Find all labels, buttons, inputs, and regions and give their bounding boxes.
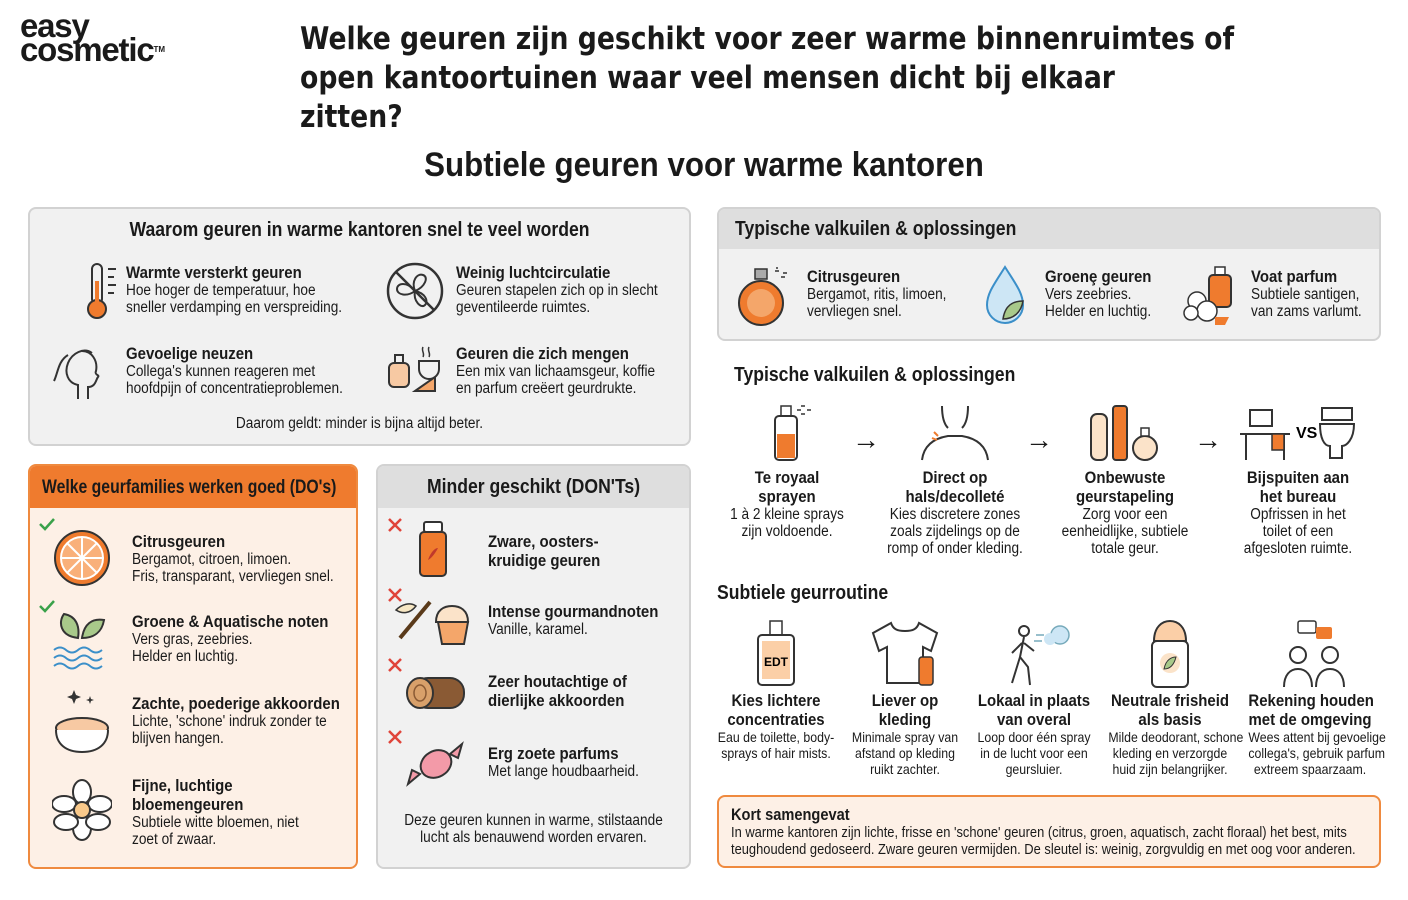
item: citrus: Fris, transparant, vervliegen snel. bbox=[132, 568, 334, 585]
footer text: lucht als benauwend worden ervaren. bbox=[420, 829, 647, 846]
callout: summary: In warme kantoren zijn lichte, frisse en 'schone' geuren (citrus, groen, aquatisch, zacht floraal) het best, mits bbox=[731, 824, 1347, 841]
item: oosters: kruidige geuren bbox=[488, 551, 600, 570]
logo bbox=[20, 7, 165, 68]
footer text: Deze geuren kunnen in warme, stilstaande bbox=[404, 812, 663, 829]
step: stapeling bbox=[1062, 405, 1188, 557]
step: bureau: het bureau bbox=[1260, 487, 1336, 506]
step: hals: hals/decolleté bbox=[906, 487, 1004, 506]
item: omgeving: Wees attent bij gevoelige bbox=[1248, 729, 1386, 745]
callout: summary: Kort samengevat bbox=[731, 805, 850, 824]
item: bloemen: zoet of zwaar. bbox=[132, 831, 216, 848]
text: warmte: sneller verdamping en verspreiding. bbox=[126, 299, 342, 316]
item: hout: Zeer houtachtige of bbox=[488, 672, 627, 691]
item: groen: Vers zeebries. bbox=[1045, 286, 1131, 303]
item: omgeving: extreem spaarzaam. bbox=[1254, 761, 1366, 777]
text: luchtcirculatie: geventileerde ruimtes. bbox=[456, 299, 590, 316]
item: parfum bbox=[1183, 266, 1362, 325]
item: kleding: Liever op bbox=[872, 691, 938, 710]
title bbox=[300, 21, 1234, 135]
step: stapeling: eenheidlijke, subtiele bbox=[1062, 523, 1188, 540]
panel: typische valkuilen top bbox=[717, 207, 1381, 341]
item: deodorant: Milde deodorant, schone bbox=[1108, 729, 1243, 745]
item: lokaal: Lokaal in plaats bbox=[978, 691, 1090, 710]
arrow: → bbox=[1025, 424, 1053, 455]
header: Typische valkuilen & oplossingen bbox=[735, 218, 1016, 240]
step: stapeling: Zorg voor een bbox=[1083, 506, 1167, 523]
title: open kantoortuinen waar veel mensen dicht bij elkaar bbox=[300, 60, 1115, 96]
header: Minder geschikt (DON'Ts) bbox=[427, 476, 640, 498]
item: poederig: Zachte, poederige akkoorden bbox=[132, 694, 340, 713]
item: parfum: Voat parfum bbox=[1251, 267, 1337, 286]
step: bureau: Bijspuiten aan bbox=[1247, 468, 1349, 487]
item: gourmand: Intense gourmandnoten bbox=[488, 602, 658, 621]
item: citrus: Bergamot, ritis, limoen, bbox=[807, 286, 946, 303]
text: warmte: Warmte versterkt geuren bbox=[126, 263, 302, 282]
item: citrus: vervliegen snel. bbox=[807, 303, 902, 320]
item: hout bbox=[388, 658, 627, 710]
header bbox=[719, 209, 1379, 249]
item: deodorant: huid zijn belangrijker. bbox=[1112, 761, 1228, 777]
item: oosters bbox=[388, 518, 600, 577]
steps row bbox=[730, 405, 1355, 557]
panel: why scents get too much bbox=[28, 207, 691, 446]
heading: Waarom geuren in warme kantoren snel te veel worden bbox=[129, 219, 590, 241]
step: royaal: zijn voldoende. bbox=[741, 523, 832, 540]
step: royaal bbox=[730, 405, 844, 540]
item: groen: Groene & Aquatische noten bbox=[132, 612, 328, 631]
item: kleding: Minimale spray van bbox=[852, 729, 958, 745]
text: mengen: en parfum creëert geurdrukte. bbox=[456, 380, 636, 397]
footer text bbox=[404, 812, 663, 846]
subtitle: Subtiele geuren voor warme kantoren bbox=[424, 146, 984, 184]
callout: summary: teughoudend gedoseerd. Zware geuren vermijden. De sleutel is: weinig, zorgvuldig en met oog voor anderen. bbox=[731, 841, 1356, 858]
item: EDT: Kies lichtere bbox=[732, 691, 820, 710]
item: groen bbox=[39, 600, 328, 670]
item: bloemen: Fijne, luchtige bbox=[132, 776, 233, 795]
step: royaal: 1 à 2 kleine sprays bbox=[730, 506, 844, 523]
item: bloemen bbox=[52, 776, 299, 848]
item: omgeving: collega's, gebruik parfum bbox=[1248, 745, 1385, 761]
item: citrus bbox=[738, 267, 946, 326]
text: warmte bbox=[126, 263, 342, 316]
step: hals: zoals zijdelings op de bbox=[890, 523, 1020, 540]
item: poederig: blijven hangen. bbox=[132, 730, 224, 747]
item: omgeving bbox=[1248, 620, 1386, 777]
item: deodorant: als basis bbox=[1138, 710, 1202, 729]
item: citrus bbox=[39, 518, 334, 586]
step: royaal: sprayen bbox=[758, 487, 816, 506]
logo: easy bbox=[20, 7, 89, 44]
item: parfum: Subtiele santigen, bbox=[1251, 286, 1359, 303]
item: groen: Helder en luchtig. bbox=[1045, 303, 1151, 320]
icon: heads bbox=[53, 350, 100, 399]
item: citrus: Citrusgeuren bbox=[132, 532, 225, 551]
item: omgeving: Rekening houden bbox=[1248, 691, 1374, 710]
item: groen: Groenȩ geuren bbox=[1045, 267, 1151, 286]
item: lokaal: geursluier. bbox=[1006, 761, 1062, 777]
text: luchtcirculatie: Weinig luchtcirculatie bbox=[456, 263, 610, 282]
step: bureau: VS bbox=[1296, 425, 1318, 442]
item: kleding: kleding bbox=[879, 710, 931, 729]
footer text: Daarom geldt: minder is bijna altijd beter. bbox=[236, 415, 483, 432]
text: gevoelige neuzen bbox=[126, 344, 343, 397]
title: zitten? bbox=[300, 99, 403, 135]
text: mengen bbox=[456, 344, 655, 397]
heading: routine: Subtiele geurroutine bbox=[717, 582, 888, 604]
logo: cosmeticTM bbox=[20, 31, 165, 68]
item: omgeving: met de omgeving bbox=[1248, 710, 1372, 729]
callout: summary bbox=[717, 795, 1381, 868]
item: EDT: sprays of hair mists. bbox=[721, 745, 831, 761]
item: kleding: ruikt zachter. bbox=[870, 761, 940, 777]
item: deodorant: kleding en verzorgde bbox=[1113, 745, 1227, 761]
item: zoet bbox=[388, 730, 639, 787]
icon: mixing bbox=[388, 346, 440, 392]
step: bureau: afgesloten ruimte. bbox=[1244, 540, 1352, 557]
item: groen bbox=[986, 265, 1151, 324]
text: luchtcirculatie bbox=[456, 263, 658, 316]
item: groen: Helder en luchtig. bbox=[132, 648, 238, 665]
item: hout: dierlijke akkoorden bbox=[488, 691, 624, 710]
step: stapeling: geurstapeling bbox=[1076, 487, 1174, 506]
header: Welke geurfamilies werken goed (DO's) bbox=[42, 477, 336, 498]
text: gevoelige neuzen: Collega's kunnen reageren met bbox=[126, 363, 315, 380]
step: stapeling: totale geur. bbox=[1091, 540, 1159, 557]
arrow: → bbox=[1194, 424, 1222, 455]
item: lokaal: in de lucht voor een bbox=[980, 745, 1088, 761]
arrow: → bbox=[852, 424, 880, 455]
item: oosters: Zware, oosters- bbox=[488, 532, 599, 551]
step: hals: Kies discretere zones bbox=[890, 506, 1020, 523]
item: gourmand bbox=[388, 588, 658, 645]
text: mengen: Een mix van lichaamsgeur, koffie bbox=[456, 363, 655, 380]
step: hals: Direct op bbox=[923, 468, 987, 487]
step: stapeling: Onbewuste bbox=[1085, 468, 1165, 487]
item: citrus: Citrusgeuren bbox=[807, 267, 900, 286]
item: kleding bbox=[852, 622, 958, 777]
step: bureau: toilet of een bbox=[1263, 523, 1333, 540]
step: royaal: Te royaal bbox=[755, 468, 819, 487]
title: Welke geuren zijn geschikt voor zeer warme binnenruimtes of bbox=[300, 21, 1234, 57]
text: luchtcirculatie: Geuren stapelen zich op in slecht bbox=[456, 282, 658, 299]
item: EDT: concentraties bbox=[727, 710, 825, 729]
text: warmte: Hoe hoger de temperatuur, hoe bbox=[126, 282, 316, 299]
item: EDT bbox=[718, 620, 834, 761]
routine row bbox=[718, 620, 1386, 777]
item: poederig: Lichte, 'schone' indruk zonder te bbox=[132, 713, 327, 730]
item: deodorant bbox=[1108, 620, 1243, 777]
header bbox=[30, 466, 356, 508]
item: poederig bbox=[55, 690, 340, 753]
item: EDT: EDT bbox=[764, 655, 789, 669]
header bbox=[378, 466, 689, 508]
item: bloemen: bloemengeuren bbox=[132, 795, 243, 814]
icon: fan crossed bbox=[386, 262, 444, 320]
icon: thermometer bbox=[87, 263, 116, 319]
text: mengen: Geuren die zich mengen bbox=[456, 344, 629, 363]
text: gevoelige neuzen: hoofdpijn of concentratieproblemen. bbox=[126, 380, 343, 397]
step: bureau: Opfrissen in het bbox=[1250, 506, 1346, 523]
item: deodorant: Neutrale frisheid bbox=[1111, 691, 1229, 710]
heading: valkuilen: Typische valkuilen & oplossingen bbox=[734, 364, 1015, 386]
panel: DON'Ts bbox=[376, 464, 691, 869]
step: hals bbox=[887, 406, 1023, 557]
item: lokaal bbox=[977, 625, 1091, 777]
item: kleding: afstand op kleding bbox=[855, 745, 955, 761]
item: parfum: van zams varlumt. bbox=[1251, 303, 1362, 320]
item: zoet: Met lange houdbaarheid. bbox=[488, 763, 639, 780]
item: lokaal: Loop door één spray bbox=[977, 729, 1091, 745]
item: lokaal: van overal bbox=[997, 710, 1071, 729]
item: EDT: Eau de toilette, body- bbox=[718, 729, 834, 745]
step: bureau bbox=[1240, 407, 1355, 557]
item: bloemen: Subtiele witte bloemen, niet bbox=[132, 814, 299, 831]
panel: DO's bbox=[28, 464, 358, 869]
text: gevoelige neuzen: Gevoelige neuzen bbox=[126, 344, 253, 363]
item: gourmand: Vanille, karamel. bbox=[488, 621, 588, 638]
item: citrus: Bergamot, citroen, limoen. bbox=[132, 551, 291, 568]
item: zoet: Erg zoete parfums bbox=[488, 744, 619, 763]
step: hals: romp of onder kleding. bbox=[887, 540, 1023, 557]
item: groen: Vers gras, zeebries. bbox=[132, 631, 253, 648]
